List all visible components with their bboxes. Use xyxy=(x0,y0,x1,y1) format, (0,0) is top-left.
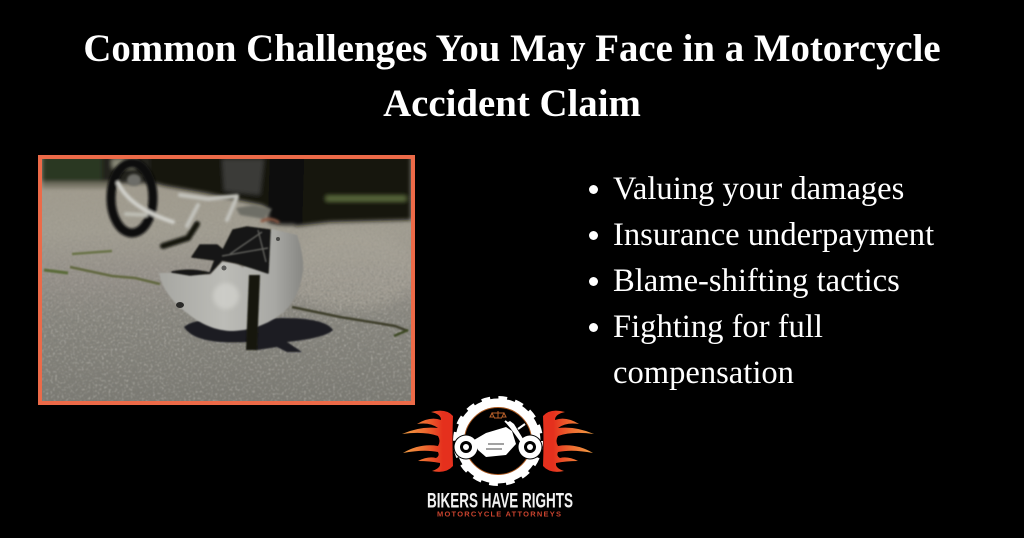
icon: left flames xyxy=(402,411,453,472)
title xyxy=(83,27,941,125)
logo: Bikers Have Rights xyxy=(402,399,594,518)
dark background with vehicle xyxy=(42,155,411,226)
icon: scales xyxy=(490,411,506,418)
photo and logo artwork xyxy=(38,155,594,516)
photo border xyxy=(40,157,413,403)
bullet: blame-shifting: Blame-shifting tactics xyxy=(613,263,900,299)
logo name: BIKERS HAVE RIGHTS xyxy=(427,490,573,512)
bullet: insurance underpayment: Insurance underpayment xyxy=(613,217,934,253)
blurred bicycle xyxy=(111,163,278,246)
bullet list xyxy=(589,171,934,391)
bullet: full compensation xyxy=(589,309,823,391)
icon: right flames xyxy=(543,411,594,472)
bullet: valuing damages: Valuing your damages xyxy=(613,171,904,207)
helmet shell xyxy=(159,229,303,331)
title: Common Challenges You May Face in a Motorcycle xyxy=(83,27,941,70)
logo tagline: MOTORCYCLE ATTORNEYS xyxy=(437,510,561,518)
helmet xyxy=(159,227,303,350)
bullet: full compensation: compensation xyxy=(613,355,794,391)
icon: gear ring xyxy=(456,399,540,483)
grass cracks xyxy=(44,251,408,336)
title: Accident Claim xyxy=(383,82,641,125)
chin strap xyxy=(246,275,260,350)
icon: motorcycle xyxy=(454,421,542,460)
road surface xyxy=(42,159,420,402)
helmet padding xyxy=(172,227,270,275)
helmet shadow xyxy=(184,318,333,352)
bullet: full compensation: Fighting for full xyxy=(613,309,823,345)
